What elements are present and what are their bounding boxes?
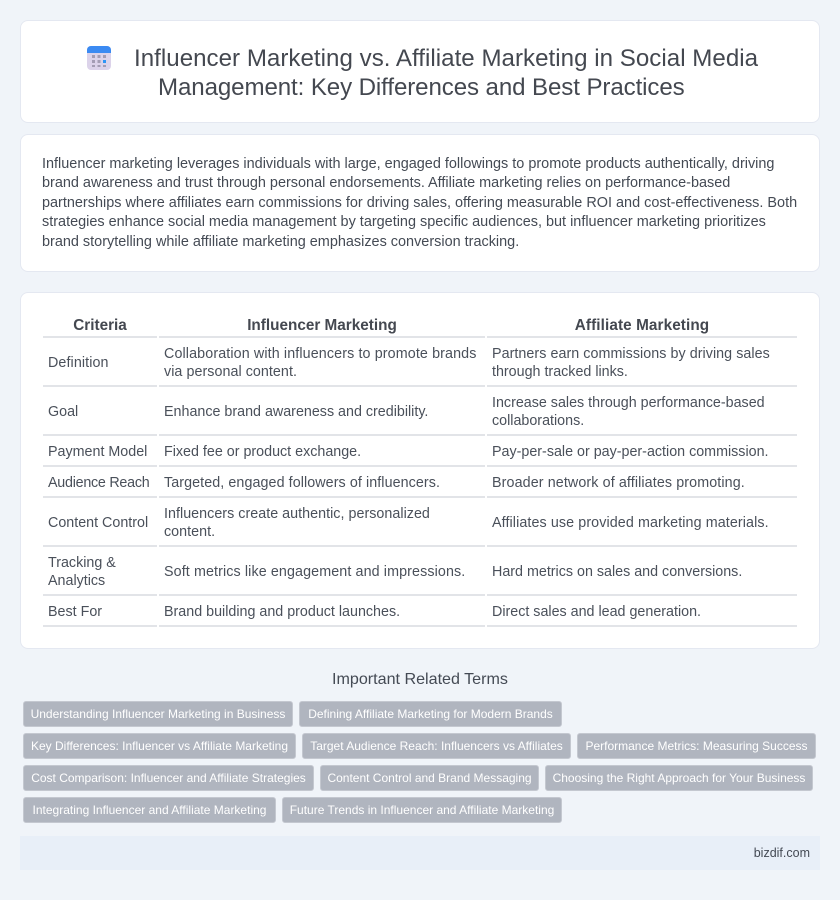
title: Management: Key Differences and Best Practices <box>158 74 685 101</box>
table rows: Definition <box>48 355 109 371</box>
table rows: Payment Model <box>48 444 147 460</box>
table rows: Fixed fee or product exchange. <box>164 444 361 460</box>
table rows: content. <box>164 524 215 540</box>
table rows: Partners earn commissions by driving sales <box>492 346 770 362</box>
intro text: partnerships where affiliates earn commissions for driving sales, offering measurable ROI and cost-effectiveness. Both <box>42 195 797 211</box>
table rows: Hard metrics on sales and conversions. <box>492 564 742 580</box>
footer bar <box>20 836 820 870</box>
table rows: Broader network of affiliates promoting. <box>492 475 745 491</box>
title: Influencer Marketing vs. Affiliate Marketing in Social Media <box>134 45 758 72</box>
table header: Criteria <box>73 317 127 334</box>
table rows: Direct sales and lead generation. <box>492 604 701 620</box>
related terms tags <box>23 701 816 823</box>
intro text: strategies enhance social media management by targeting specific audiences, but influencer marketing prioritizes <box>42 214 766 230</box>
table rows: Collaboration with influencers to promote brands <box>164 346 477 362</box>
table rows: Brand building and product launches. <box>164 604 400 620</box>
related terms tags: Key Differences: Influencer vs Affiliate Marketing <box>31 739 288 753</box>
related terms tags: Performance Metrics: Measuring Success <box>585 739 808 753</box>
table rows: Pay-per-sale or pay-per-action commission. <box>492 444 769 460</box>
title <box>134 45 758 101</box>
table header <box>73 317 709 334</box>
table header: Influencer Marketing <box>247 317 397 334</box>
related terms tags: Future Trends in Influencer and Affiliate Marketing <box>290 803 554 817</box>
table rows: Enhance brand awareness and credibility. <box>164 404 428 420</box>
related terms tags: Choosing the Right Approach for Your Business <box>553 771 805 785</box>
icon: calendar <box>87 46 111 70</box>
related terms tags: Content Control and Brand Messaging <box>327 771 532 785</box>
related terms heading: Important Related Terms <box>332 670 508 688</box>
related terms tags: Target Audience Reach: Influencers vs Affiliates <box>310 739 563 753</box>
table rows: Increase sales through performance-based <box>492 395 765 411</box>
table rows: Targeted, engaged followers of influencers. <box>164 475 440 491</box>
table rows: via personal content. <box>164 364 297 380</box>
table header: Affiliate Marketing <box>575 317 709 334</box>
comparison table panel <box>20 292 820 649</box>
related terms tags: Defining Affiliate Marketing for Modern Brands <box>308 707 553 721</box>
table rows: Affiliates use provided marketing materials. <box>492 515 769 531</box>
table rows: Soft metrics like engagement and impressions. <box>164 564 465 580</box>
related terms tags: Cost Comparison: Influencer and Affiliate Strategies <box>31 771 306 785</box>
table rows <box>43 336 797 627</box>
table rows: Influencers create authentic, personalized <box>164 506 430 522</box>
intro panel <box>20 134 820 272</box>
table rows: Audience Reach <box>48 475 149 491</box>
table rows: through tracked links. <box>492 364 628 380</box>
intro text: Influencer marketing leverages individuals with large, engaged followings to promote products authentically, driving <box>42 156 774 172</box>
table rows: Best For <box>48 604 102 620</box>
intro text <box>42 156 797 250</box>
table rows: Goal <box>48 404 78 420</box>
table rows: Content Control <box>48 515 148 531</box>
table rows: Tracking & <box>48 555 116 571</box>
intro text: brand awareness and trust through personal endorsements. Affiliate marketing relies on performance-based <box>42 175 730 191</box>
intro text: brand storytelling while affiliate marketing emphasizes conversion tracking. <box>42 234 519 250</box>
table rows: collaborations. <box>492 413 584 429</box>
related terms tags: Integrating Influencer and Affiliate Marketing <box>33 803 266 817</box>
related terms tags: Understanding Influencer Marketing in Business <box>31 707 285 721</box>
header panel <box>20 20 820 123</box>
table rows: Analytics <box>48 573 105 589</box>
footer source: bizdif.com <box>754 846 810 860</box>
